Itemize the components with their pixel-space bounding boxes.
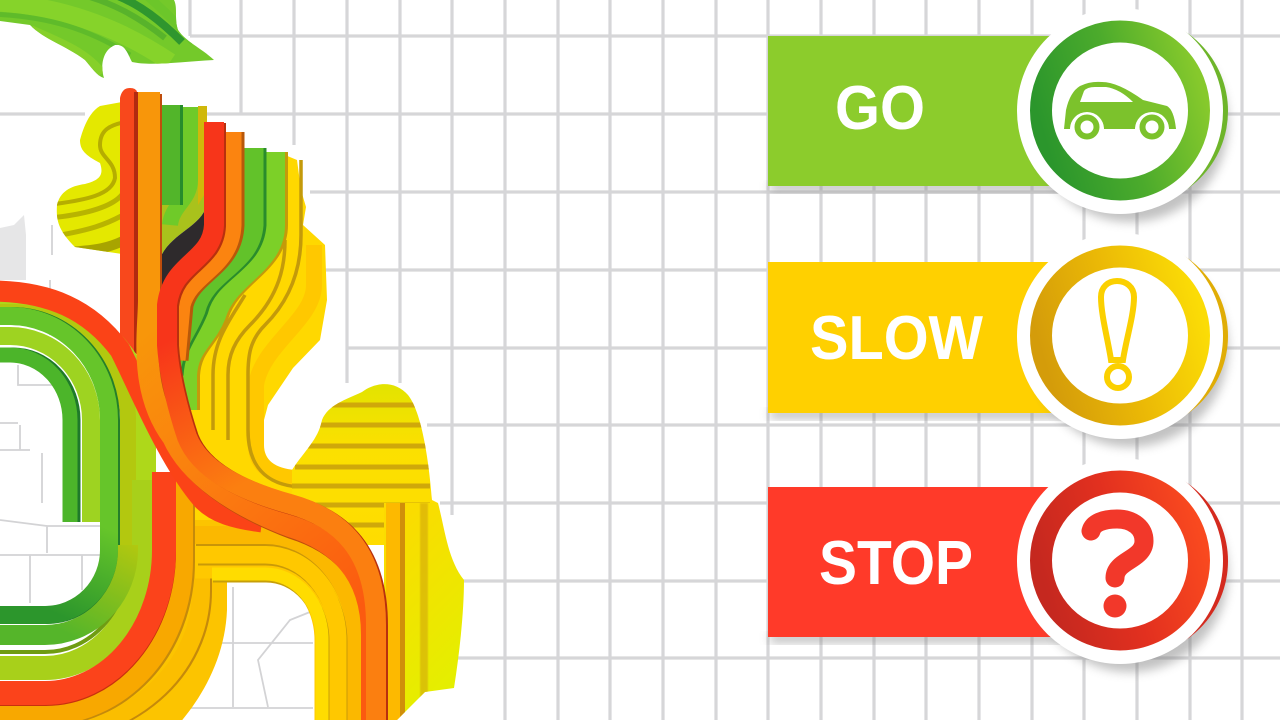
icon: car	[1064, 82, 1176, 136]
map: left wing yellow stripes	[56, 102, 120, 254]
STOP circle shadow	[1032, 476, 1228, 672]
badge: STOP	[768, 458, 1228, 672]
SLOW white disc	[1017, 233, 1223, 439]
badge: SLOW	[768, 233, 1228, 447]
map: upper left green loop	[0, 300, 145, 615]
SLOW circle shadow	[1032, 251, 1228, 447]
SLOW ring	[1041, 256, 1199, 414]
icon: exclamation mark	[1101, 281, 1134, 388]
map: right yellow area	[384, 503, 464, 720]
SLOW label: SLOW	[810, 304, 983, 373]
GO ring	[1041, 32, 1199, 190]
badge: GO	[768, 8, 1228, 222]
GO white disc	[1017, 8, 1223, 214]
SLOW banner	[768, 262, 1068, 413]
STOP banner	[768, 487, 1068, 637]
map: short centre green bands	[160, 105, 207, 258]
STOP ring	[1041, 482, 1199, 640]
SLOW back crescent	[1038, 241, 1228, 431]
map: upper peninsula	[0, 0, 214, 78]
GO back crescent	[1038, 16, 1228, 206]
GO circle shadow	[1032, 26, 1228, 222]
GO banner	[768, 36, 1068, 186]
map: lower left green and red loop	[0, 472, 203, 720]
map: thumb horizontal stripes	[292, 384, 438, 545]
SLOW banner shadow	[770, 409, 1070, 419]
map: orange band from the north into the crossing	[147, 92, 374, 720]
icon: question mark	[1091, 519, 1144, 618]
map: red band from the north into the crossing	[167, 122, 378, 720]
STOP back crescent	[1038, 466, 1228, 656]
STOP label: STOP	[819, 529, 973, 598]
map: lower yellow arcs	[195, 535, 357, 720]
GO label: GO	[835, 74, 925, 143]
map: first red vertical band	[120, 88, 138, 355]
GO banner shadow	[770, 182, 1070, 192]
map: red diagonal band	[0, 291, 262, 522]
map: dark teardrop shadow	[160, 205, 207, 300]
STOP white disc	[1017, 458, 1223, 664]
map: lower left yellow fill	[0, 520, 227, 720]
map: green bands from the north	[170, 148, 277, 410]
STOP banner shadow	[770, 633, 1070, 643]
map: second orange band	[176, 132, 235, 360]
county map lines	[0, 215, 313, 708]
map: yellow fan fill and lines	[190, 155, 327, 540]
